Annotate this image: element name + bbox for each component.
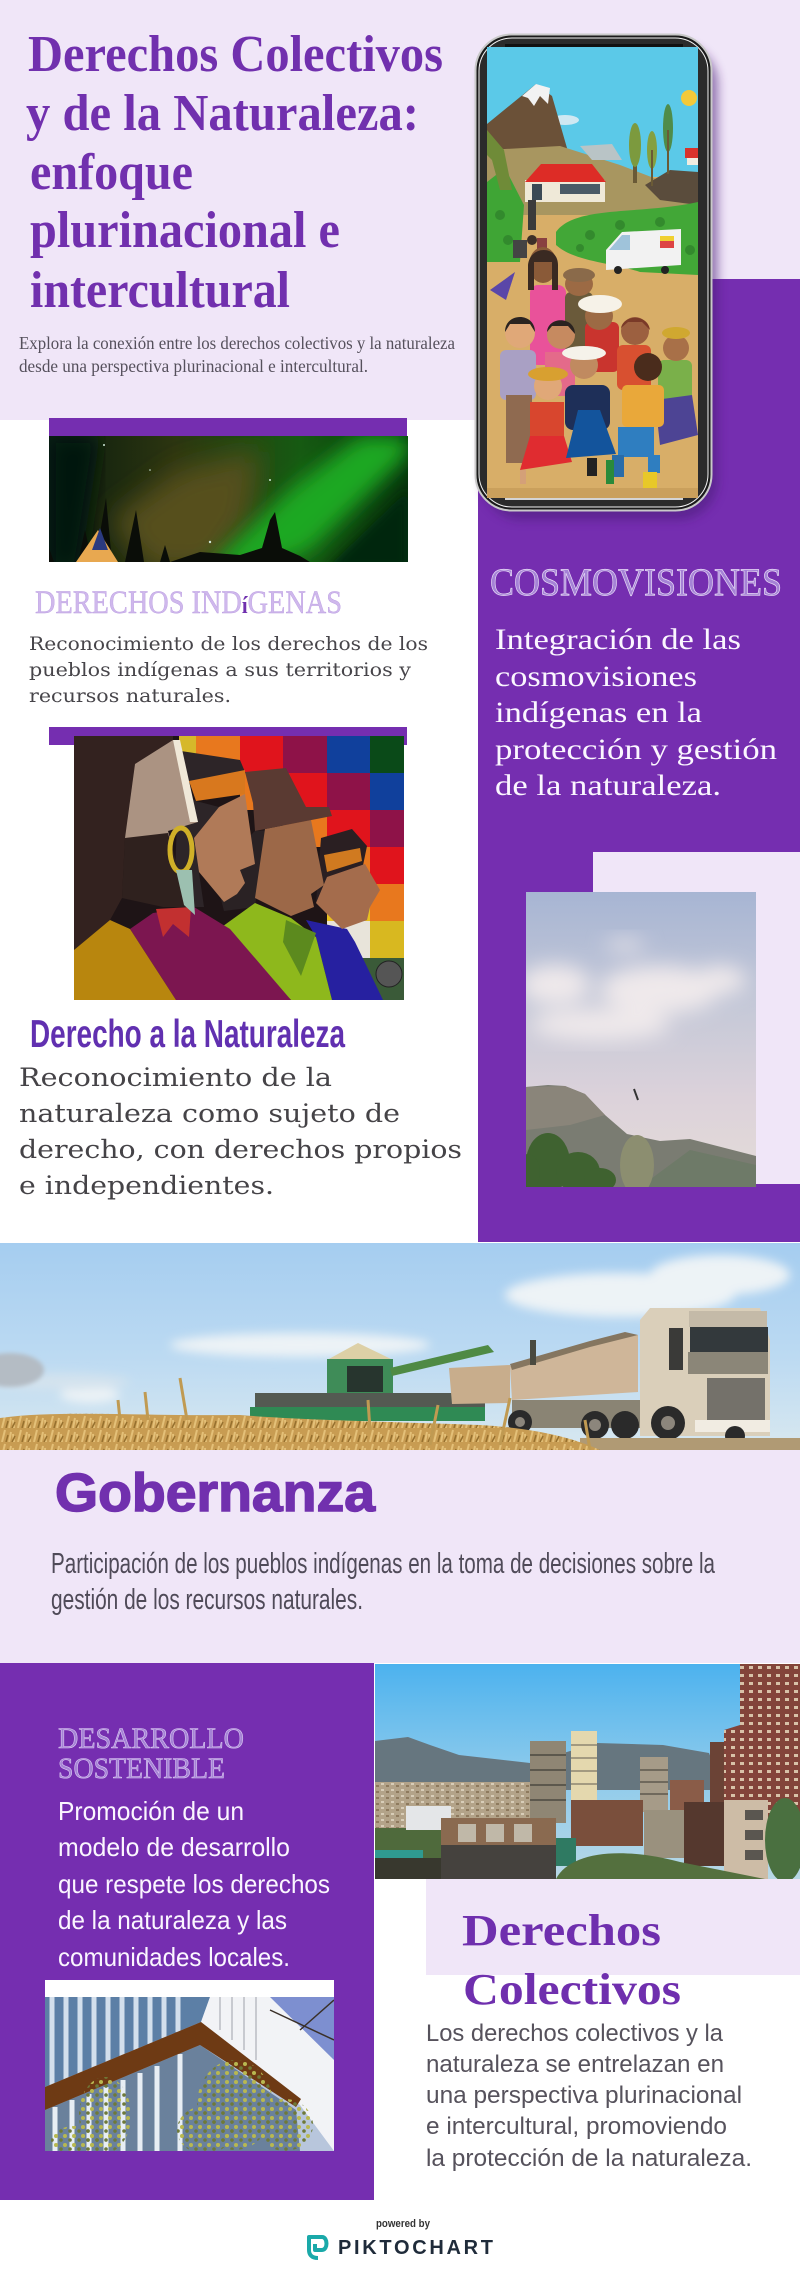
profile 2: [130, 751, 291, 1000]
text: gobernanza: [51, 1548, 716, 1616]
photo: mountain and sky: [516, 892, 756, 1195]
profile 4: [306, 829, 383, 1000]
text: desarrollo sostenible: Promoción de un: [58, 1796, 244, 1826]
panel: desarrollo sostenible: [0, 1663, 374, 2200]
text: derecho a la naturaleza: [19, 1063, 462, 1200]
text: gobernanza: gestión de los recursos naturales.: [51, 1584, 363, 1616]
heading: derechos indígenas: DERECHOS INDíGENAS: [35, 585, 342, 621]
photo: city skyline: [375, 1664, 800, 1882]
illustration: community scene on phone screen: [487, 47, 698, 498]
combine harvester: [250, 1343, 494, 1421]
heading: cosmovisiones: COSMOVISIONES: [490, 561, 782, 604]
text: derechos colectivos: e intercultural, promoviendo: [426, 2113, 727, 2140]
intro text: [19, 333, 455, 376]
phone body: [476, 34, 712, 510]
text: desarrollo sostenible: de la naturaleza y las: [58, 1905, 287, 1935]
wheat field: [580, 1438, 800, 1450]
text: cosmovisiones: cosmovisiones: [495, 660, 697, 693]
text: derechos indígenas: recursos naturales.: [29, 685, 231, 707]
phone shadow: [482, 44, 718, 520]
panel: gobernanza: [0, 1450, 800, 1663]
heading: desarrollo sostenible: SOSTENIBLE: [58, 1752, 225, 1785]
footer: powered by piktochart: [309, 2218, 493, 2259]
heading: desarrollo sostenible: [58, 1722, 244, 1785]
text: desarrollo sostenible: que respete los derechos: [58, 1869, 330, 1899]
title: enfoque: [30, 144, 193, 201]
title: [26, 26, 443, 319]
purple bar: [49, 418, 407, 436]
text: cosmovisiones: [495, 623, 777, 802]
panel: derechos colectivos: [426, 1879, 800, 2172]
photo: aurora with purple bar: [49, 418, 408, 570]
purple bar behind mural: [49, 727, 407, 745]
text: derechos colectivos: [426, 2020, 752, 2172]
photo: wiphala mural with four profiles: [74, 736, 404, 1000]
photo: harvest with combine and truck: [0, 1243, 800, 1450]
text: derechos colectivos: una perspectiva plurinacional: [426, 2082, 742, 2109]
text: derecho a la naturaleza: naturaleza como sujeto de: [19, 1099, 400, 1128]
text: desarrollo sostenible: [58, 1796, 330, 1972]
lilac heading band: [426, 1879, 800, 1975]
text: derechos colectivos: la protección de la naturaleza.: [426, 2145, 752, 2172]
photo: modern building: [45, 1997, 334, 2154]
background: top lilac panel: [0, 0, 800, 420]
text: derecho a la naturaleza: Reconocimiento de la: [19, 1063, 332, 1092]
lilac accent panel: [593, 852, 800, 1184]
title: plurinacional e: [30, 202, 340, 259]
text: derechos indígenas: Reconocimiento de los derechos de los: [29, 633, 428, 655]
phone top and bottom rim: [505, 44, 683, 47]
heading: gobernanza: Gobernanza: [55, 1463, 376, 1523]
heading: derecho a la naturaleza: Derecho a la Naturaleza: [30, 1013, 345, 1056]
text: derecho a la naturaleza: e independientes.: [19, 1171, 274, 1200]
text: desarrollo sostenible: modelo de desarrollo: [58, 1832, 290, 1862]
night sky: [49, 436, 408, 570]
footer: powered by piktochart: powered by: [376, 2218, 431, 2230]
profile 3: [214, 768, 332, 1000]
text: derechos indígenas: pueblos indígenas a sus territorios y: [29, 659, 411, 681]
footer: powered by piktochart: PIKTOCHART: [338, 2237, 493, 2259]
icon: piktochart logo: [309, 2237, 326, 2258]
title: intercultural: [30, 262, 290, 319]
white band above building photo: [45, 1980, 334, 1997]
panel: right purple column: [478, 279, 800, 1242]
profile 1: [74, 736, 198, 1000]
heading: derechos colectivos: Colectivos: [463, 1965, 681, 2014]
text: cosmovisiones: protección y gestión: [495, 733, 777, 766]
text: cosmovisiones: de la naturaleza.: [495, 769, 721, 802]
wiphala checker: [179, 736, 404, 1000]
title: Derechos Colectivos: [28, 26, 443, 83]
title: y de la Naturaleza:: [26, 85, 419, 142]
heading: derechos colectivos: Derechos: [462, 1906, 661, 1955]
text: derechos colectivos: naturaleza se entrelazan en: [426, 2051, 724, 2078]
intro text: Explora la conexión entre los derechos colectivos y la naturaleza: [19, 333, 455, 353]
text: cosmovisiones: Integración de las: [495, 623, 741, 656]
text: derechos colectivos: Los derechos colectivos y la: [426, 2020, 724, 2047]
truck and trailers: [449, 1308, 770, 1446]
intro text: desde una perspectiva plurinacional e intercultural.: [19, 356, 368, 376]
text: derechos indígenas: [29, 633, 428, 707]
phone with illustration: [476, 34, 718, 520]
heading: derechos colectivos: [462, 1906, 681, 2014]
text: derecho a la naturaleza: derecho, con derechos propios: [19, 1135, 462, 1164]
heading: desarrollo sostenible: DESARROLLO: [58, 1722, 244, 1755]
text: cosmovisiones: indígenas en la: [495, 696, 702, 729]
text: desarrollo sostenible: comunidades locales.: [58, 1942, 290, 1972]
